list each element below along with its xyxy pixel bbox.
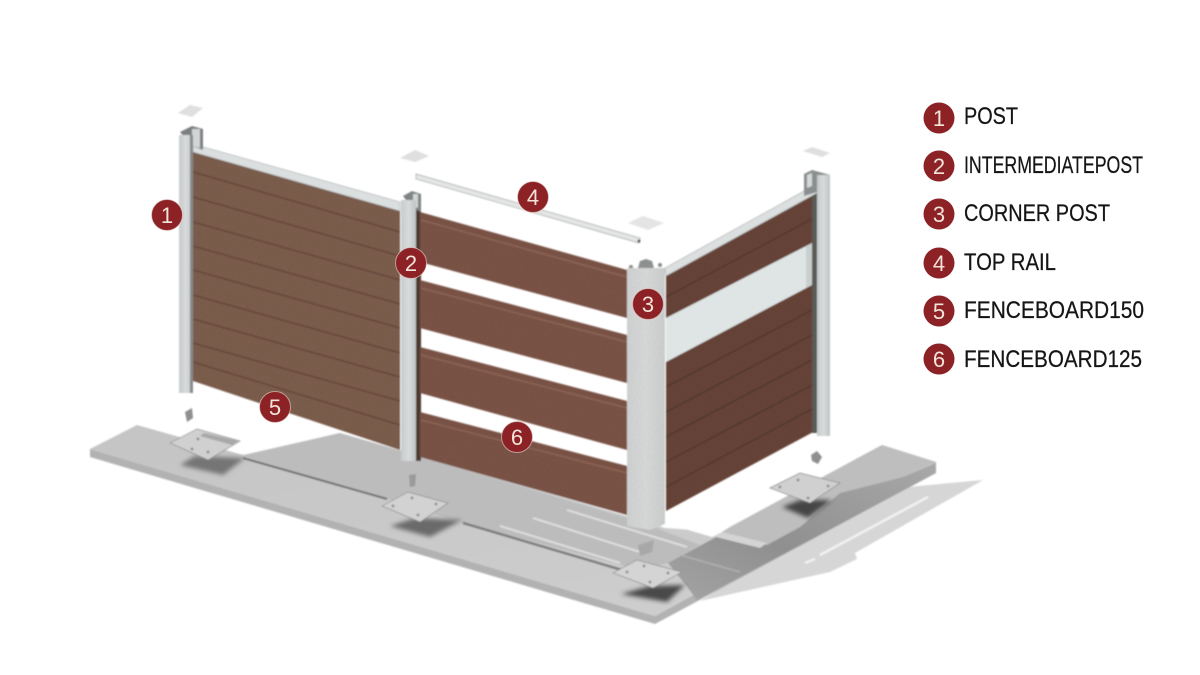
post 4 xyxy=(804,170,830,436)
left top rail xyxy=(193,144,400,211)
cap 4 xyxy=(803,147,830,157)
post 1 xyxy=(179,126,203,393)
right panel xyxy=(666,193,817,511)
ground shadow xyxy=(700,480,983,601)
legend item: fenceboard 150: 5 xyxy=(933,299,945,324)
legend item: corner post: 3 xyxy=(933,202,945,227)
cap 2 xyxy=(400,150,429,162)
legend item: intermediate post: INTERMEDIATEPOST xyxy=(964,152,1143,179)
base plate 3 xyxy=(613,540,685,602)
concrete slab xyxy=(90,425,936,624)
legend item: post: 1 xyxy=(933,106,945,131)
legend item: intermediate post: 2 xyxy=(933,154,945,179)
base plate 2 xyxy=(382,474,462,537)
callout 6: 6 xyxy=(511,425,523,450)
legend item: top rail: TOP RAIL xyxy=(964,249,1056,276)
base plate 4 xyxy=(770,451,840,518)
callout 4 xyxy=(518,182,548,212)
cap 1 xyxy=(178,105,203,117)
corner post 3 xyxy=(627,259,665,530)
top rail xyxy=(416,174,640,243)
legend item: post xyxy=(924,102,1018,134)
callout 3: 3 xyxy=(642,292,654,317)
legend item: fenceboard 125: 6 xyxy=(933,347,945,372)
middle panel: fenceboard 125 xyxy=(416,207,627,515)
callout 2 xyxy=(396,248,426,278)
callout 1 xyxy=(152,200,182,230)
legend item: fenceboard 150 xyxy=(924,296,1144,326)
left panel: fenceboard 150 xyxy=(193,150,400,450)
legend item: top rail xyxy=(924,248,1056,278)
fence illustration xyxy=(90,105,983,624)
legend item: fenceboard 125: FENCEBOARD125 xyxy=(964,346,1142,373)
right top rail xyxy=(665,185,817,276)
callout 5: 5 xyxy=(269,395,281,420)
base plate 1 xyxy=(170,408,245,475)
cap 3 xyxy=(628,216,664,230)
legend item: top rail: 4 xyxy=(933,251,945,276)
callout 5 xyxy=(260,392,290,422)
callout 2: 2 xyxy=(405,251,417,276)
callout 4: 4 xyxy=(527,185,539,210)
legend item: corner post: CORNER POST xyxy=(964,200,1110,227)
legend item: fenceboard 125 xyxy=(924,344,1142,374)
callout 1: 1 xyxy=(161,203,173,228)
legend item: corner post xyxy=(924,198,1110,230)
callout 6 xyxy=(502,422,532,452)
post 2 xyxy=(401,191,421,461)
legend item: post: POST xyxy=(964,103,1018,130)
legend item: intermediate post xyxy=(924,150,1143,182)
legend item: fenceboard 150: FENCEBOARD150 xyxy=(964,297,1144,324)
callout 3 xyxy=(632,288,664,320)
legend xyxy=(924,102,1144,374)
